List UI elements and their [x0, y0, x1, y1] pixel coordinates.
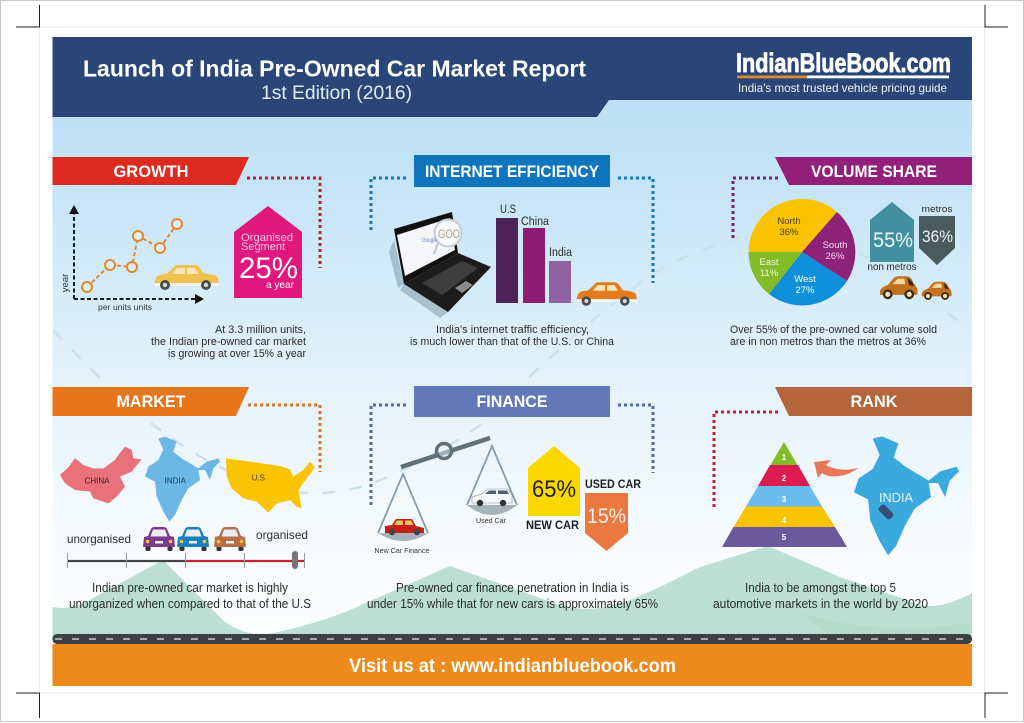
- title: Launch of India Pre-Owned Car Market Report: [83, 56, 586, 82]
- map: India highlighted: [854, 436, 959, 555]
- caption: finance: under 15% while that for new cars is approximately 65%: [367, 597, 658, 611]
- caption: rank: India to be amongst the top 5: [745, 581, 896, 595]
- chart: rank pyramid: 1: [782, 453, 787, 462]
- panel: rank: [713, 387, 972, 611]
- caption: market: Indian pre-owned car market is highly: [92, 581, 289, 595]
- road: [52, 634, 972, 644]
- callout: metros 36%: metros: [922, 204, 953, 215]
- caption: volume share: [730, 324, 937, 348]
- map: India: INDIA: [165, 476, 187, 485]
- chart: rank pyramid: 2: [782, 474, 787, 483]
- callout: non metros 55%: non metros: [868, 262, 916, 273]
- chart: rank pyramid: [722, 442, 847, 547]
- icon: yellow car: [154, 265, 219, 290]
- scale labels: organised: [256, 528, 308, 542]
- logo: IndianBlueBook.com: [736, 48, 951, 78]
- map: India: [145, 437, 220, 522]
- heading: market: [52, 387, 249, 416]
- caption: growth: the Indian pre-owned car market: [151, 336, 306, 348]
- caption: market: [69, 581, 311, 611]
- logo: [736, 48, 951, 95]
- caption: rank: [713, 581, 928, 611]
- heading: internet efficiency: INTERNET EFFICIENCY: [425, 162, 600, 181]
- caption: internet efficiency: is much lower than that of the U.S. or China: [410, 336, 615, 348]
- pie chart: regions: East: [759, 257, 779, 268]
- pie chart: regions: [748, 199, 855, 305]
- icon: laptop with magnifier: Google: [422, 238, 438, 244]
- callout: new car 65%: NEW CAR: [526, 518, 579, 532]
- callout: organised segment: Organised: [241, 232, 293, 244]
- caption: market: unorganized when compared to that of the U.S: [69, 597, 311, 611]
- caption: rank: automotive markets in the world by 2020: [713, 597, 928, 611]
- chart: rank pyramid: 3: [782, 495, 787, 504]
- chart: growth line: per units units: [98, 302, 152, 312]
- header band: [52, 37, 972, 117]
- callout: non metros 55%: [868, 202, 916, 273]
- icon: laptop with magnifier: GOO: [438, 227, 460, 241]
- caption: internet efficiency: [410, 324, 615, 348]
- icon: laptop with magnifier: [389, 212, 491, 318]
- panel: finance: [367, 386, 658, 611]
- bar chart: internet traffic: China: [521, 216, 550, 228]
- callout: organised segment: 25%: [239, 252, 298, 285]
- pie chart: regions: West: [794, 274, 816, 285]
- arrow: India to pyramid: [814, 460, 858, 478]
- footer banner: Visit us at : www.indianbluebook.com: [349, 656, 676, 677]
- icon: balance scale: [374, 438, 517, 555]
- caption: growth: is growing at over 15% a year: [168, 348, 306, 360]
- scale labels: unorganised: [67, 532, 131, 546]
- scale labels: [67, 528, 308, 546]
- callout: metros 36%: 36%: [922, 227, 953, 246]
- pie chart: regions: 36%: [779, 227, 799, 238]
- heading: growth: GROWTH: [114, 162, 188, 181]
- heading: finance: FINANCE: [476, 392, 548, 411]
- icon: two small cars: [880, 276, 952, 300]
- callout: organised segment: [234, 206, 302, 298]
- mountains: [52, 546, 972, 636]
- callout: organised segment: a year: [266, 279, 294, 291]
- map: China: CHINA: [85, 476, 110, 485]
- panel background: [52, 100, 972, 645]
- caption: finance: Pre-owned car finance penetration in India is: [396, 581, 629, 595]
- callout: used car 15%: USED CAR: [585, 477, 641, 491]
- icon: white car: [472, 489, 512, 506]
- icon: balance scale: New Car Finance: [374, 546, 430, 555]
- heading: volume share: [775, 157, 972, 185]
- footer banner: [52, 644, 972, 686]
- map: U.S: [226, 458, 315, 513]
- heading: internet efficiency: [414, 155, 610, 187]
- callout: metros 36%: [919, 204, 955, 265]
- heading: finance: [414, 386, 610, 417]
- pie chart: regions: 11%: [760, 268, 779, 279]
- bar chart: internet traffic: India: [549, 247, 573, 259]
- caption: volume share: are in non metros than the metros at 36%: [730, 336, 926, 348]
- callout: used car 15%: [585, 477, 641, 551]
- icon: three cars: [143, 527, 246, 551]
- heading: market: MARKET: [116, 392, 186, 411]
- heading: rank: [775, 387, 972, 416]
- caption: finance: [367, 581, 658, 611]
- chart: growth line: year: [60, 274, 71, 292]
- caption: growth: [151, 324, 306, 360]
- subtitle: 1st Edition (2016): [261, 83, 412, 104]
- map: China: [60, 447, 142, 503]
- caption: internet efficiency: India's internet traffic efficiency,: [436, 324, 589, 336]
- logo: India's most trusted vehicle pricing guide: [738, 81, 947, 95]
- panel: volume share: [730, 157, 972, 348]
- icon: balance scale: Used Car: [476, 516, 506, 525]
- bar chart: internet traffic: U.S: [500, 204, 516, 216]
- chart: growth line: [60, 205, 204, 312]
- pie chart: regions: 27%: [795, 285, 815, 296]
- callout: new car 65%: [526, 446, 580, 532]
- caption: growth: At 3.3 million units,: [215, 324, 306, 336]
- dashed route line: [53, 232, 957, 493]
- callout: non metros 55%: 55%: [873, 229, 913, 252]
- icon: orange car: [576, 282, 637, 306]
- caption: volume share: Over 55% of the pre-owned car volume sold: [730, 324, 937, 336]
- pie chart: regions: 26%: [825, 251, 845, 262]
- chart: rank pyramid: 5: [782, 533, 787, 542]
- heading: growth: [52, 157, 249, 185]
- callout: organised segment: Segment: [241, 241, 285, 253]
- heading: volume share: VOLUME SHARE: [811, 162, 937, 181]
- scale bar: [67, 551, 304, 569]
- icon: red car: [385, 519, 424, 535]
- callout: new car 65%: 65%: [532, 476, 576, 503]
- pie chart: regions: North: [777, 216, 801, 227]
- panel: growth: [52, 157, 320, 360]
- panel: internet efficiency: [371, 155, 653, 348]
- map: India highlighted: INDIA: [879, 490, 913, 505]
- panel: market: [52, 387, 320, 611]
- heading: rank: RANK: [850, 392, 898, 411]
- map: U.S: U.S: [252, 474, 265, 483]
- callout: used car 15%: 15%: [587, 505, 626, 528]
- bar chart: internet traffic: [496, 204, 573, 303]
- pie chart: regions: South: [823, 240, 847, 251]
- chart: rank pyramid: 4: [782, 516, 787, 525]
